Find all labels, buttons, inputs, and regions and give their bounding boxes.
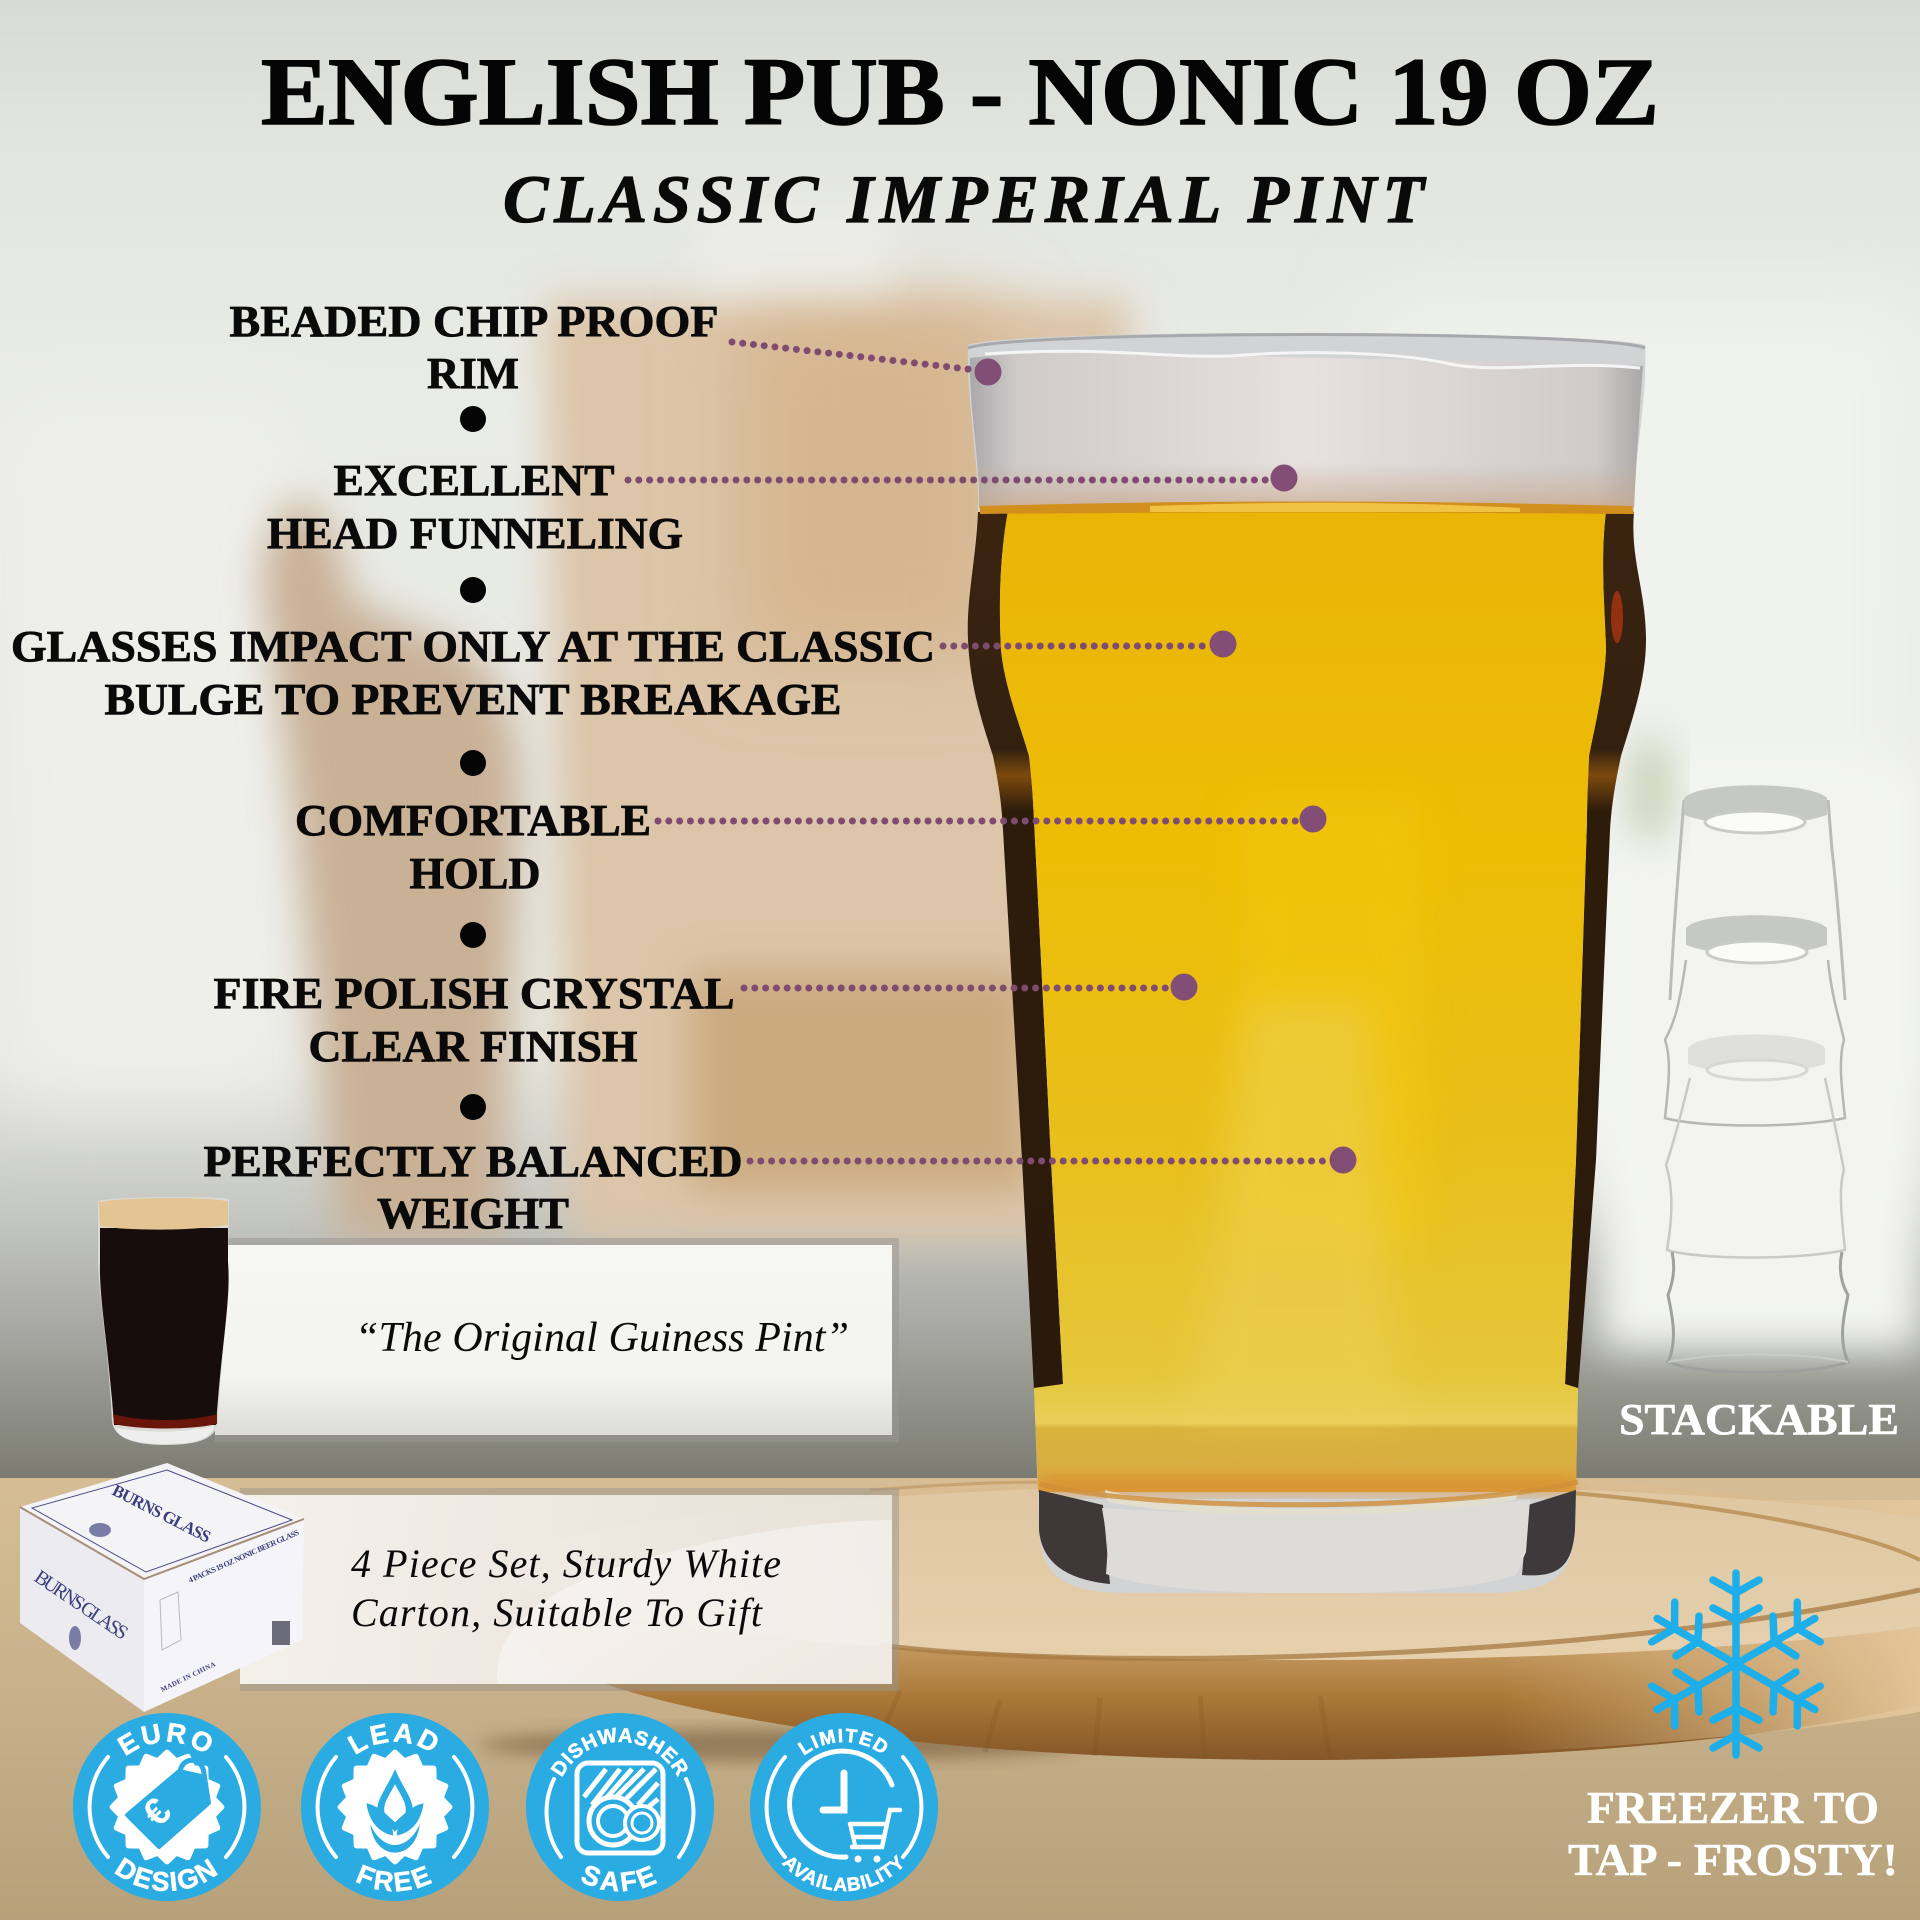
- callout: perfectly balanced weight: WEIGHT: [377, 1189, 569, 1238]
- large beer glass: [968, 333, 1646, 1593]
- separator bullet: [460, 922, 486, 948]
- callout: fire polish crystal clear finish: [214, 969, 1198, 1071]
- badge: limited availability: [750, 1713, 938, 1901]
- callout: perfectly balanced weight: [204, 1137, 1356, 1238]
- callout: perfectly balanced weight: PERFECTLY BALANCED: [204, 1137, 742, 1186]
- icon: clock and cart: [790, 1751, 900, 1862]
- badge: limited availability: LIMITED: [797, 1728, 888, 1756]
- icon: dishwasher with plates: [577, 1763, 663, 1853]
- badge: euro design: [73, 1713, 261, 1901]
- subtitle: CLASSIC IMPERIAL PINT: [503, 161, 1426, 237]
- callout: comfortable hold: HOLD: [410, 849, 540, 898]
- glass base: [1039, 1482, 1578, 1593]
- stackable label: STACKABLE: [1619, 1395, 1899, 1444]
- callout: excellent head funneling: EXCELLENT: [334, 456, 614, 505]
- callout: comfortable hold: [295, 796, 1326, 898]
- icon: drop and leaves: [366, 1769, 424, 1853]
- panel text: “The Original Guiness Pint”: [355, 1315, 849, 1361]
- product carton: MADE IN CHINA: [159, 1660, 217, 1694]
- callout: glasses impact only at the bulge: GLASSES IMPACT ONLY AT THE CLASSIC: [11, 622, 935, 671]
- badge: euro design: DESIGN: [114, 1857, 218, 1892]
- dark glass side bands: [968, 512, 1646, 1390]
- icon: euro price tag: €: [135, 1790, 180, 1835]
- product carton: BURNS GLASS: [109, 1481, 214, 1547]
- callout: glasses impact only at the bulge: BULGE TO PREVENT BREAKAGE: [104, 675, 842, 724]
- beer surface line: [980, 502, 1634, 514]
- product carton: [20, 1463, 304, 1712]
- badge: euro design: EURO: [116, 1722, 212, 1756]
- separator bullet: [460, 406, 486, 432]
- rim highlight: [968, 334, 1645, 348]
- wooden serving board: [510, 1470, 1920, 1760]
- callout: excellent head funneling: HEAD FUNNELING: [267, 509, 683, 558]
- callout: comfortable hold: COMFORTABLE: [295, 796, 651, 845]
- glass one: [1670, 785, 1845, 1000]
- badge: lead free: [301, 1713, 489, 1901]
- title: ENGLISH PUB - NONIC 19 OZ: [261, 38, 1659, 145]
- icon: euro price tag: [127, 1760, 209, 1847]
- separator bullet: [460, 750, 486, 776]
- panel text: 4 Piece Set, Sturdy White: [351, 1541, 781, 1586]
- badge: lead free: LEAD: [347, 1723, 438, 1754]
- badge: dishwasher safe: DISHWASHER: [550, 1727, 688, 1778]
- freezer to tap label: [1568, 1782, 1898, 1885]
- panel text: Carton, Suitable To Gift: [351, 1590, 763, 1635]
- callout: beaded chip proof rim: BEADED CHIP PROOF: [230, 297, 718, 346]
- callout: fire polish crystal clear finish: CLEAR FINISH: [308, 1022, 638, 1071]
- callout: excellent head funneling: [267, 456, 1298, 558]
- badge: lead free: FREE: [356, 1864, 432, 1892]
- stackable glasses: [1665, 785, 1848, 1372]
- stout pint glass: [98, 1197, 229, 1445]
- icon: snowflake: [1646, 1573, 1826, 1755]
- callout: fire polish crystal clear finish: FIRE POLISH CRYSTAL: [214, 969, 734, 1018]
- badge: dishwasher safe: SAFE: [582, 1865, 658, 1892]
- freezer to tap label: FREEZER TO: [1587, 1782, 1879, 1833]
- badge: dishwasher safe: [526, 1713, 714, 1901]
- callout: beaded chip proof rim: [230, 297, 1002, 398]
- freezer to tap label: TAP - FROSTY!: [1568, 1834, 1898, 1885]
- panel: original guinness pint: [215, 1238, 899, 1442]
- product carton: 4 PACKS 19 OZ NONIC BEER GLASS: [187, 1528, 301, 1585]
- separator bullet: [460, 1094, 486, 1120]
- glass three: [1666, 1034, 1845, 1258]
- separator bullet: [460, 577, 486, 603]
- bubble reflection: [1611, 591, 1623, 643]
- callout: glasses impact only at the bulge: [11, 622, 1236, 724]
- panel text: [351, 1541, 781, 1635]
- callout: beaded chip proof rim: RIM: [427, 349, 519, 398]
- glass four: [1668, 1252, 1848, 1372]
- glass two: [1665, 915, 1845, 1126]
- foam head: [970, 352, 1643, 508]
- badge: limited availability: AVAILABILITY: [781, 1854, 902, 1892]
- product carton: BURNS GLASS: [30, 1566, 132, 1645]
- panel: four piece set carton: [240, 1488, 899, 1691]
- beer body: [1000, 510, 1606, 1492]
